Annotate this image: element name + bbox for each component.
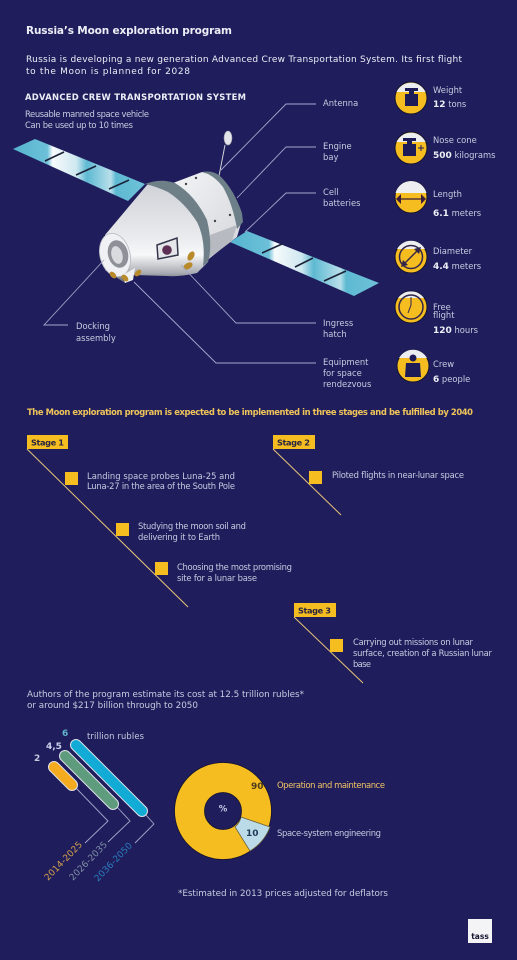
system heading: Reusable manned space vehicle: [25, 109, 149, 119]
spec: weight: [395, 82, 466, 114]
stage 1: delivering it to Earth: [138, 532, 220, 542]
stage 1: Stage 1: [31, 438, 64, 448]
stage 3: [294, 603, 493, 683]
hatch: [157, 238, 178, 259]
intro text: to the Moon is planned for 2028: [26, 67, 190, 77]
stage 3: surface, creation of a Russian lunar: [353, 648, 493, 658]
spec: length: Length: [433, 189, 462, 199]
title: Russia’s Moon exploration program: [26, 25, 232, 37]
stage 2: Piloted flights in near-lunar space: [332, 470, 464, 480]
bar chart: trillion rubles: [34, 729, 154, 884]
stage 1: [27, 435, 292, 607]
docking assembly: [95, 230, 135, 280]
solar panel: left: [13, 139, 145, 201]
bar chart: trillion rubles: 2026-2035: [68, 840, 110, 883]
system heading: ADVANCED CREW TRANSPORTATION SYSTEM: [25, 92, 246, 102]
solar panel: right: [230, 231, 379, 296]
callout labels: Engine: [323, 141, 352, 151]
callout labels: Cell: [323, 187, 339, 197]
spec: crew: [397, 350, 470, 385]
callout lines: [44, 104, 316, 363]
logo: TASS: [468, 919, 492, 943]
spec: crew: 6 people: [433, 374, 470, 385]
spec: length: [395, 181, 481, 219]
callout labels: rendezvous: [323, 379, 371, 389]
stage 2: [273, 435, 464, 515]
bar chart: trillion rubles: 2036-2050: [93, 841, 135, 884]
stage 1: Luna-27 in the area of the South Pole: [87, 481, 235, 491]
spec: free flight: [395, 291, 478, 336]
logo: TASS: tass: [471, 932, 489, 941]
service module: [173, 172, 243, 262]
spec: diameter: Diameter: [433, 246, 473, 256]
bar chart: trillion rubles: 4,5: [46, 742, 62, 752]
bar chart: trillion rubles: 2014-2025: [43, 840, 85, 883]
spec: weight: Weight: [433, 85, 463, 95]
intro text: [26, 55, 462, 77]
cost text: [27, 690, 305, 711]
spec: length: 6.1 meters: [433, 208, 481, 219]
bar chart: trillion rubles: 2: [34, 754, 40, 764]
donut chart: 90: [251, 782, 264, 792]
callout labels: Equipment: [323, 357, 369, 367]
intro text: Russia is developing a new generation Advanced Crew Transportation System. Its first flight: [26, 55, 462, 65]
stage 1: site for a lunar base: [177, 573, 257, 583]
callout labels: bay: [323, 152, 338, 162]
callout labels: hatch: [323, 329, 347, 339]
connector lines: [76, 788, 154, 843]
system heading: Can be used up to 10 times: [25, 120, 133, 130]
antenna: [219, 131, 232, 176]
donut chart: %: [219, 804, 228, 814]
stage 3: Carrying out missions on lunar: [353, 637, 474, 647]
callout labels: Antenna: [323, 98, 358, 108]
callout labels: [76, 98, 371, 389]
donut chart: Operation and maintenance: [277, 780, 385, 790]
donut chart: Space-system engineering: [277, 828, 381, 838]
bar chart: trillion rubles: trillion rubles: [87, 731, 144, 741]
callout labels: Docking: [76, 321, 110, 331]
spec: weight: 12 tons: [433, 99, 466, 110]
spec: nose cone: Nose cone: [433, 135, 477, 145]
cost text: Authors of the program estimate its cost at 12.5 trillion rubles*: [27, 690, 305, 700]
spec: free flight: 120 hours: [433, 325, 478, 336]
stage 2: Stage 2: [277, 438, 310, 448]
spec: diameter: 4.4 meters: [433, 261, 481, 272]
spec: nose cone: 500 kilograms: [433, 150, 496, 161]
spec: free flight: Free: [433, 302, 451, 312]
system heading: [25, 92, 246, 130]
spec: nose cone: [395, 132, 496, 164]
bar chart: trillion rubles: 6: [62, 729, 68, 739]
stage 1: Landing space probes Luna-25 and: [87, 471, 235, 481]
footnote: *Estimated in 2013 prices adjusted for deflators: [178, 889, 388, 899]
thrusters: [108, 250, 196, 283]
stages heading: The Moon exploration program is expected to be implemented in three stages and be fulfilled by 2040: [27, 407, 473, 417]
donut chart: 10: [246, 829, 259, 839]
spec: diameter: [395, 241, 481, 273]
callout labels: Ingress: [323, 318, 353, 328]
stage 3: base: [353, 659, 371, 669]
cost text: or around $217 billion through to 2050: [27, 701, 198, 711]
donut chart: [174, 762, 385, 860]
spec: free flight: flight: [433, 310, 455, 320]
stage 1: Choosing the most promising: [177, 562, 292, 572]
spacecraft illustration: [13, 131, 379, 296]
callout labels: for space: [323, 368, 362, 378]
callout labels: assembly: [76, 333, 116, 343]
callout labels: batteries: [323, 198, 360, 208]
stage 3: Stage 3: [298, 606, 331, 616]
spec: crew: Crew: [433, 359, 454, 369]
crew capsule: [105, 181, 210, 283]
stage 1: Studying the moon soil and: [138, 521, 246, 531]
